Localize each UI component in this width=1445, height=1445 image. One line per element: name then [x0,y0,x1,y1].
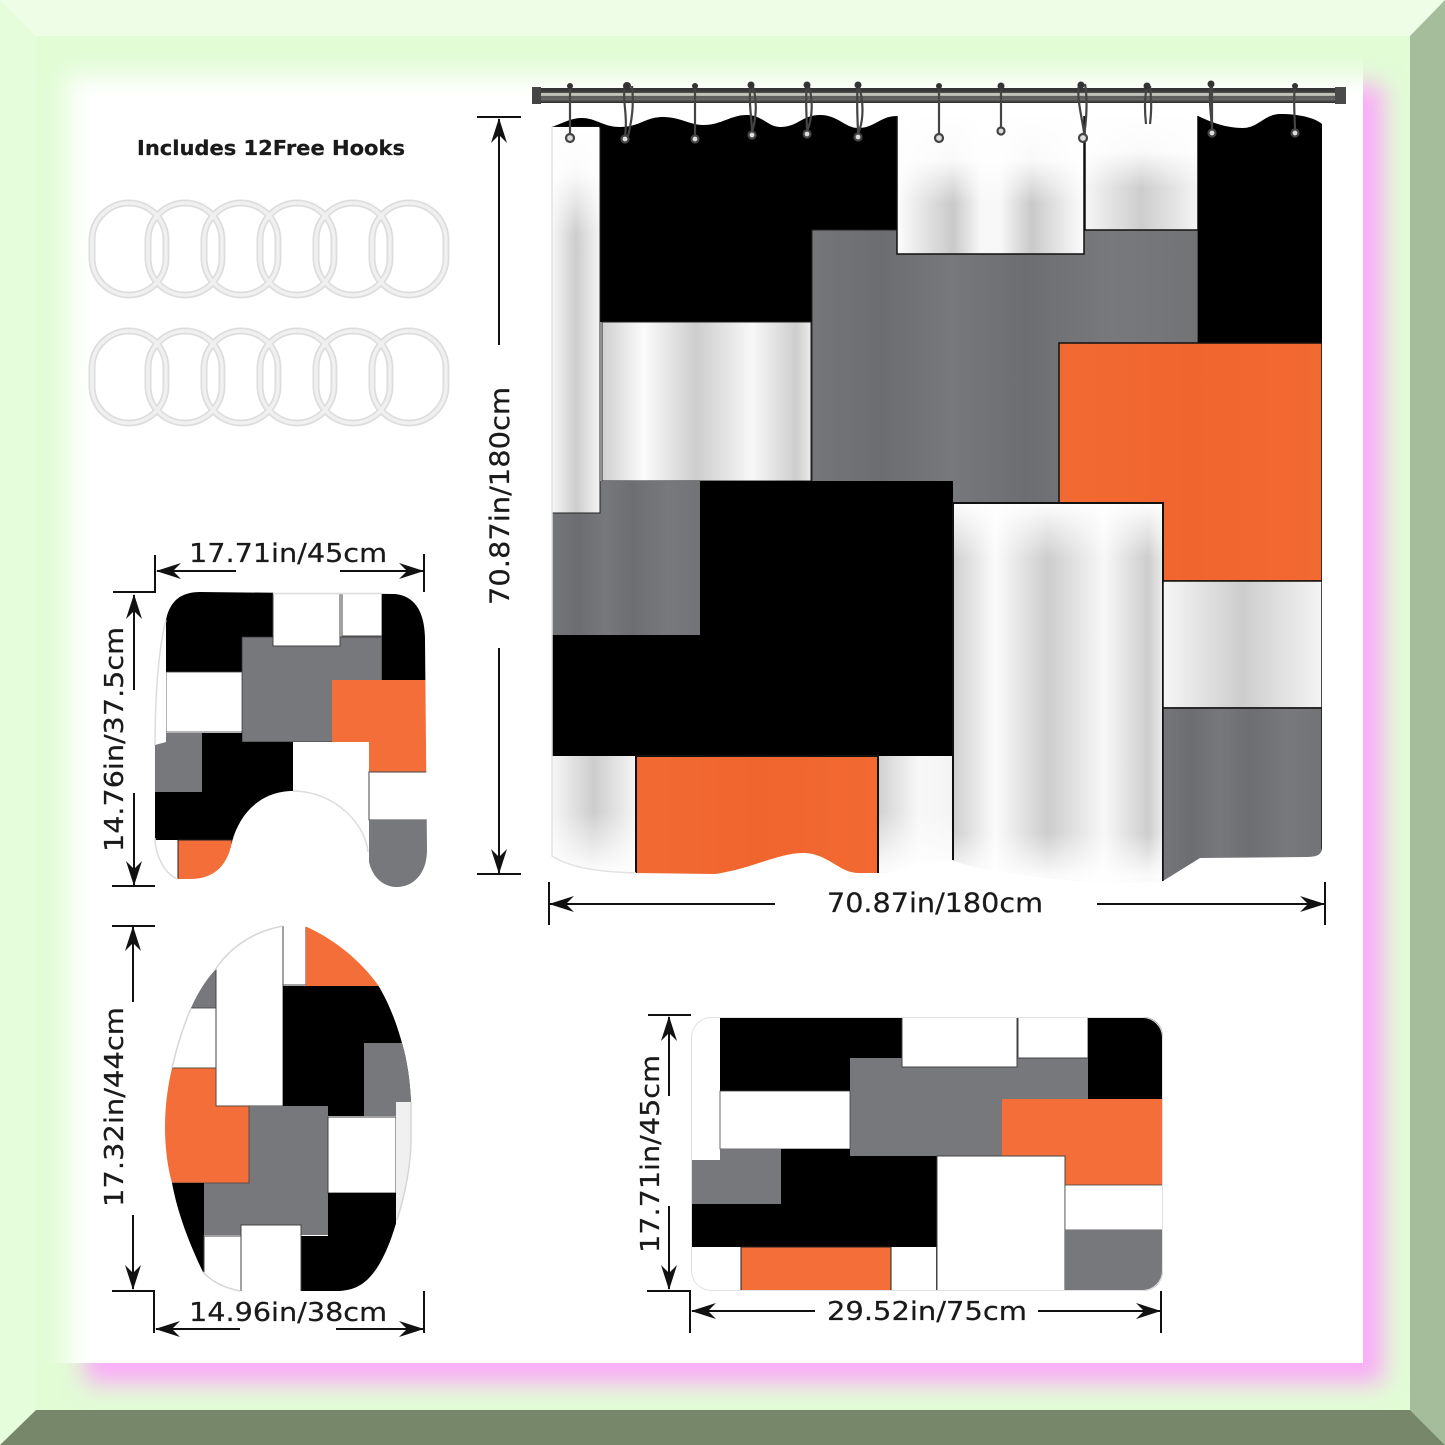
dimension: curtain height: 70.87in/180cm [485,387,516,605]
bath mat: white right [1065,1185,1165,1230]
dimension: bath mat height: 17.71in/45cm [636,1055,666,1253]
contour mat: gray centre [242,637,382,742]
bath mat: gray left [691,1149,781,1204]
curtain: black centre [552,481,953,756]
lid: white left [172,1008,216,1068]
dimension: contour mat height: 14.76in/37.5cm [100,627,130,852]
curtain: white top right [1085,110,1198,230]
bath mat: black centre [691,1149,937,1247]
icon: shower curtain rings [92,203,446,423]
bath mat: orange [1002,1099,1165,1185]
dimension: contour mat width [113,539,424,592]
bath mat: gray bottom right [1065,1230,1165,1293]
bath mat: white left [720,1091,850,1149]
bath mat: white top [902,1015,1017,1067]
curtain hooks [566,80,1298,142]
bath mat [691,1015,1165,1293]
curtain: large white panel [953,503,1163,888]
contour mat [150,590,430,892]
lid: gray top left [191,970,216,1008]
contour mat: white right [369,772,429,820]
lid: black bottom right [301,1193,396,1295]
lid: gray centre [204,1106,328,1235]
curtain: black top left [545,110,897,322]
bath mat: divider [936,1247,937,1291]
dimension: bath mat width: 29.52in/75cm [827,1297,1027,1327]
lid: gray right [364,1043,414,1116]
lid: white bottom [241,1225,301,1295]
contour mat: white top [273,590,340,646]
dimension: curtain width: 70.87in/180cm [827,888,1043,919]
curtain rod [532,87,1346,104]
contour mat: white left [166,672,242,732]
bath mat: gray centre [850,1058,1088,1156]
lid: orange left [160,1068,249,1183]
curtain: white right [1163,581,1322,708]
bath mat: black top right [1088,1015,1165,1099]
contour mat: gray left [150,733,202,792]
curtain: orange right [1059,343,1322,581]
curtain: black top right [1198,110,1322,343]
shower curtain [545,110,1330,890]
dimension: curtain width [549,882,1325,925]
curtain: orange bottom [636,756,878,881]
lid: black bottom left [160,1183,204,1293]
contour mat: black top left [166,590,273,672]
contour mat: orange [332,680,430,772]
heading: includes free hooks: Includes 12Free Hooks [137,136,405,160]
lid: white right [328,1117,396,1193]
bath mat: white large [937,1156,1065,1293]
lid: outline shading [172,926,411,1291]
dimension: lid width: 14.96in/38cm [189,1298,387,1328]
lid: black upper [283,986,413,1116]
bath mat: white top right [1018,1015,1088,1058]
lid: white narrow top [283,920,306,985]
curtain: white bottom middle [879,756,952,881]
lid: white tall [216,969,284,1106]
curtain: gray left [552,481,700,635]
curtain: white top centre [897,110,1084,254]
dimension: curtain height [477,117,521,874]
frame: bottom bevel [0,1410,1445,1445]
dimension: lid height: 17.32in/44cm [100,1007,130,1207]
curtain: white left middle [602,322,811,481]
bath mat: orange bottom [741,1247,891,1293]
curtain: gray bottom right [1163,708,1322,888]
curtain: edge shading [552,127,636,873]
contour mat: white centre [293,742,369,743]
curtain: white bottom left [553,756,635,864]
dimension: lid width [112,1291,424,1333]
dimension: bath mat width [647,1291,1161,1333]
contour mat: black top right [382,590,427,680]
contour mat: white top right [342,590,382,636]
bath mat: black top left [720,1015,902,1091]
lid: orange top [306,926,378,986]
contour mat: black centre [150,733,293,840]
dimension: contour mat width: 17.71in/45cm [189,539,387,569]
curtain: left white strip [552,127,600,513]
frame: left bevel [0,0,36,1445]
contour mat: outline shading [155,594,382,879]
lid: white edge strip [396,1102,416,1292]
frame: right bevel [1410,0,1445,1445]
toilet lid cover [160,920,416,1296]
bath mat: edge shading [692,1018,1162,1290]
contour mat: orange foot [178,840,232,882]
contour mat: gray bottom right [369,820,429,890]
lid: white bottom small [204,1236,241,1296]
curtain: gray centre [812,230,1198,503]
frame: top bevel [0,0,1445,36]
